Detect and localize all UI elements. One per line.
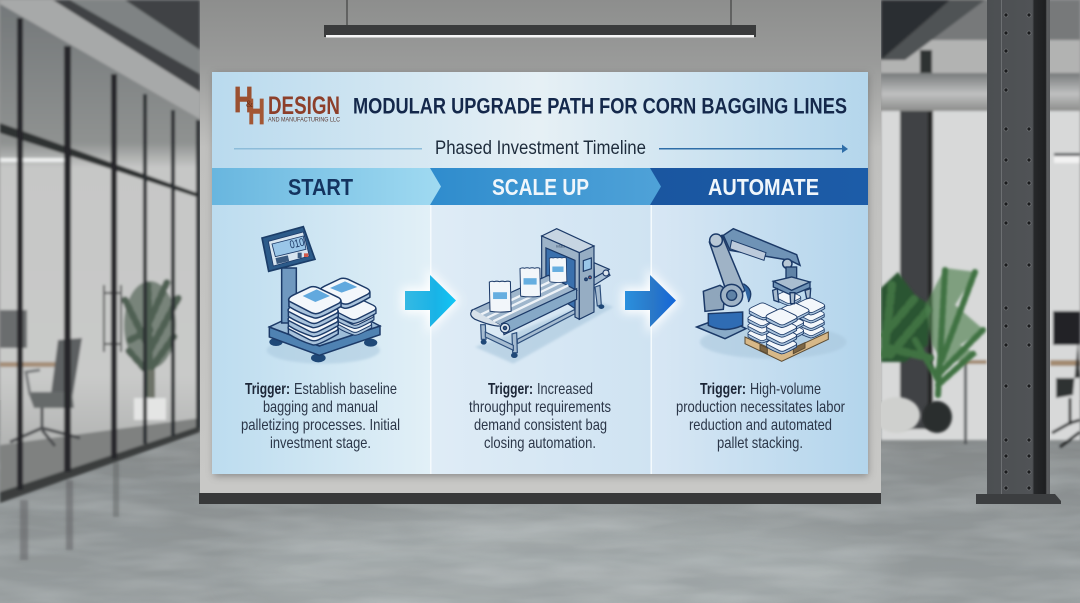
- robot upper arm: [723, 229, 800, 265]
- text: Start trigger: investment stage.: [270, 435, 371, 452]
- text: Scale Up trigger: [469, 381, 611, 452]
- panel: Automate column: [651, 205, 868, 474]
- text: Start trigger: bagging and manual: [263, 399, 378, 416]
- ceiling light fixture: [324, 0, 756, 38]
- arrow: Start to Scale Up: [405, 275, 456, 327]
- text: Automate trigger: pallet stacking.: [717, 435, 803, 452]
- text: Scale Up trigger: Increased: [537, 381, 593, 398]
- phase band: Automate: [650, 168, 868, 205]
- robot motor box: [703, 285, 725, 311]
- conveyor far extension: [594, 263, 610, 285]
- phase band: Scale Up: [430, 168, 661, 205]
- conveyor belt: [471, 275, 577, 335]
- subtitle: phased investment timeline with arrow: [234, 138, 848, 159]
- bag held by gripper: [776, 290, 801, 306]
- background: floor: [0, 400, 1080, 603]
- text: Automate trigger: High-volume: [750, 381, 821, 398]
- pallet: [745, 332, 828, 361]
- robot base plate: [697, 317, 746, 339]
- scale display head: 010: [289, 237, 306, 252]
- background: right office area with ducts, column and plants: [874, 0, 1080, 504]
- plants and pots: [874, 268, 984, 433]
- stacked bags: [748, 298, 825, 354]
- logo: H&H Design and Manufacturing: H: [234, 79, 253, 120]
- panel: Scale Up column: [431, 205, 651, 474]
- phase band: Start: [212, 168, 441, 205]
- column dividers: [430, 205, 652, 474]
- title: MODULAR UPGRADE PATH FOR CORN BAGGING LINES: [353, 94, 847, 118]
- text: Automate trigger: reduction and automated: [689, 417, 832, 434]
- logo: H&H Design and Manufacturing: [234, 79, 341, 132]
- phase band: Scale Up: SCALE UP: [492, 174, 589, 200]
- logo: H&H Design and Manufacturing: AND MANUFACTURING LLC: [268, 118, 341, 124]
- text: Automate trigger: [676, 381, 846, 452]
- panel: header background: [212, 72, 868, 169]
- bags on conveyor: [489, 258, 567, 312]
- scale feet: [269, 338, 377, 362]
- text: Scale Up trigger: Trigger:: [488, 381, 533, 398]
- text: Scale Up trigger: closing automation.: [484, 435, 596, 452]
- icon: platform scale with bags: [262, 227, 380, 364]
- infographic poster: [212, 72, 868, 476]
- gate back pillar and opening: [542, 229, 594, 319]
- background: glass office partition on the left: [0, 0, 200, 560]
- text: Scale Up trigger: throughput requirements: [469, 399, 611, 416]
- text: Automate trigger: Trigger:: [700, 381, 746, 398]
- gripper: [773, 277, 811, 304]
- background: feature wall with baseboard: [199, 0, 881, 504]
- steel column: [976, 0, 1061, 504]
- scale platform: [269, 319, 380, 355]
- logo: H&H Design and Manufacturing: H: [248, 91, 265, 132]
- bags: right stack: [320, 278, 376, 335]
- robot blue pedestal: [708, 312, 743, 329]
- conveyor legs: [481, 285, 601, 353]
- phase band: Start: START: [288, 174, 353, 200]
- icon: conveyor with bag closer: [471, 229, 613, 364]
- icon: conveyor with bag closer: Intact: [556, 245, 565, 249]
- subtitle: phased investment timeline with arrow: Phased Investment Timeline: [435, 138, 646, 159]
- text: Start trigger: Establish baseline: [294, 381, 397, 398]
- text: Scale Up trigger: demand consistent bag: [474, 417, 607, 434]
- icon: robotic palletizer: [697, 229, 847, 361]
- logo: H&H Design and Manufacturing: DESIGN: [268, 92, 340, 120]
- scale column: [282, 268, 296, 323]
- text: Automate trigger: production necessitates labor: [676, 399, 846, 416]
- robot lower arm: [709, 235, 745, 302]
- arrow: Scale Up to Automate: [625, 275, 676, 327]
- phase band: Automate: AUTOMATE: [708, 174, 819, 200]
- panel: Start column: [212, 205, 431, 474]
- bags: left stack: [288, 287, 341, 345]
- text: Start trigger: [241, 381, 400, 452]
- gate front pillar: [579, 246, 594, 319]
- text: Start trigger: palletizing processes. Initial: [241, 417, 400, 434]
- text: Start trigger: Trigger:: [245, 381, 290, 398]
- logo: H&H Design and Manufacturing: &: [246, 99, 253, 109]
